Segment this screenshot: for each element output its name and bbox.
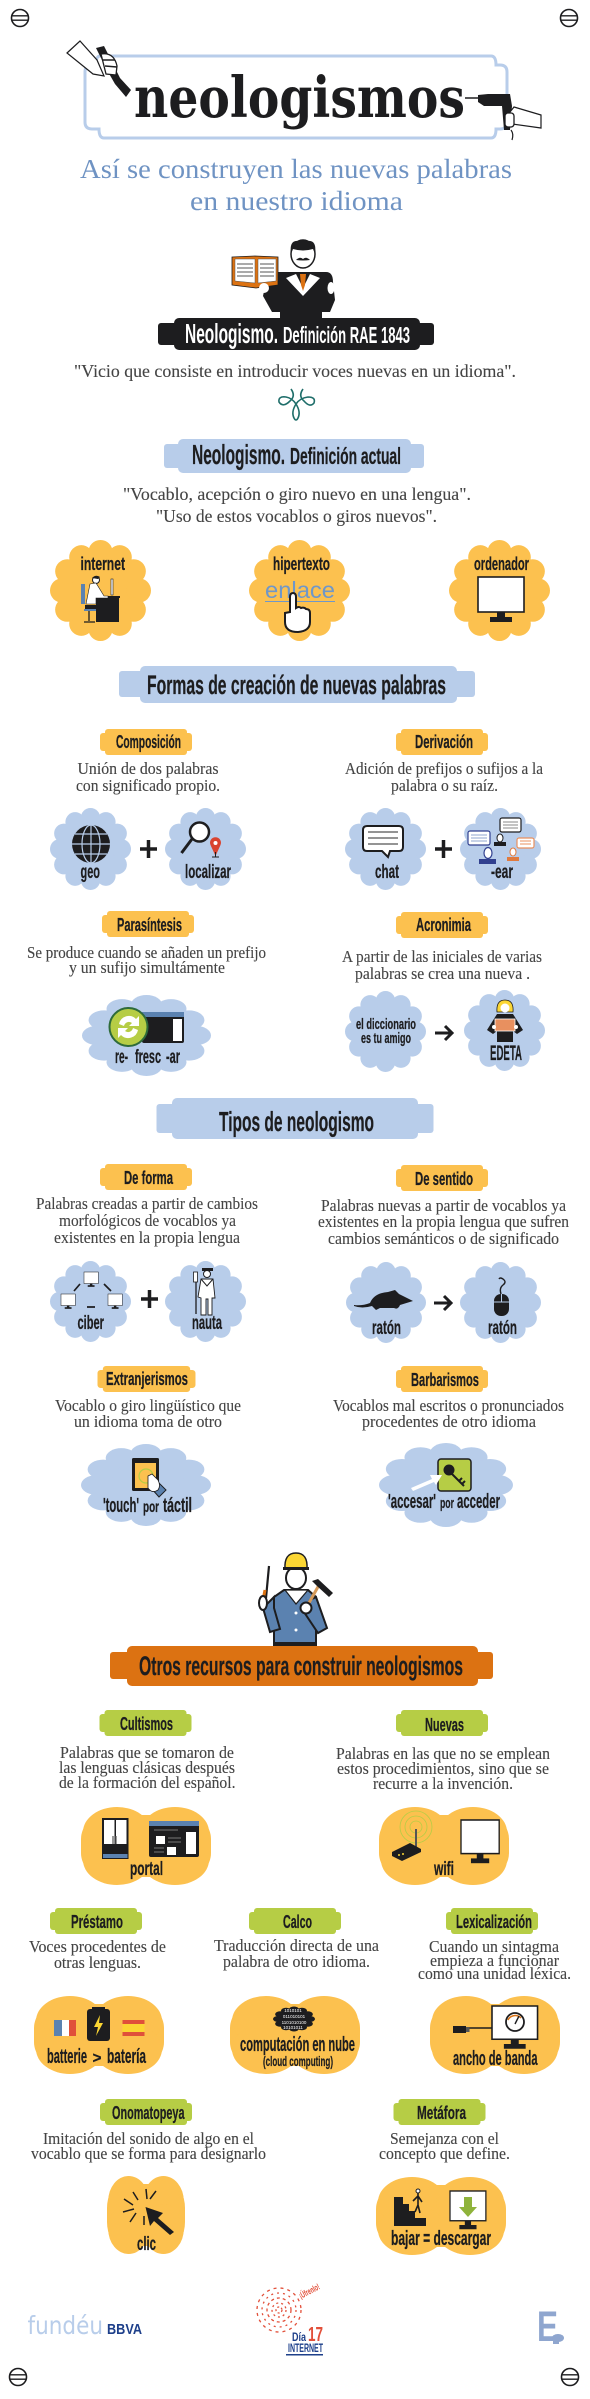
icon: binary cloud [273,2006,315,2032]
description: Traducción directa de una [214,1936,380,1955]
panel: composicion: localizar [185,862,231,883]
description: Palabras que se tomaron de [60,1743,234,1762]
icon: person at desk [81,576,120,622]
panel: onomatopeya: clic [137,2234,156,2255]
tab: Composición [116,732,181,752]
panel: calco: (cloud computing) [263,2053,333,2069]
tab: Calco [283,1912,312,1932]
tab: Metáfora [417,2103,467,2123]
tab [394,2099,486,2125]
current definition text [123,484,471,526]
banner: definicion actual [164,439,424,473]
corner mark bottom left [10,2368,26,2386]
plus [141,1290,158,1308]
description [27,943,266,977]
description: existentes en la propia lengua que sufren [318,1212,569,1231]
icon: person on stairs [394,2189,426,2226]
icon: monitor with gauge and cable [453,2006,538,2049]
banner: tipos de neologismo [156,1098,434,1139]
icon: web window [149,1821,199,1857]
icon: computer mouse [494,1278,509,1316]
arrow [434,1296,451,1310]
panel: parasintesis: fresc [135,1047,161,1068]
icon: chat bubble [363,826,403,857]
icon: battery [87,2007,110,2041]
tab [396,1710,488,1736]
tab: Parasíntesis [117,915,182,935]
description: Adición de prefijos o sufijos a la [345,759,544,778]
description: Unión de dos palabras [78,759,218,778]
icon: binary cloud: 1101010100 [282,2020,307,2025]
panel: lexicalizacion [418,1908,571,2074]
icon: hand with drill [465,94,541,140]
description [55,1396,241,1431]
description [59,1743,236,1792]
description [318,1196,569,1248]
panel: extranjerismos: por [143,1499,159,1516]
description: Voces procedentes de [29,1937,166,1956]
panel: composicion [50,729,246,890]
logo: Dia de Internet: INTERNET [288,2341,323,2355]
figure: construction worker [259,1553,333,1646]
panel: extranjerismos: táctil [163,1495,192,1517]
description [333,1396,564,1431]
panel: nuevas: wifi [433,1859,454,1880]
description: Palabras creadas a partir de cambios [36,1194,258,1213]
panel: de forma [36,1164,258,1342]
corner mark top left [12,10,28,26]
description: A partir de las iniciales de varias [342,947,542,966]
arrow [435,1026,452,1040]
icon: click cursor [123,2189,174,2235]
description: concepto que define. [379,2144,510,2163]
banner: definicion actual: Definición actual [290,443,401,469]
description: Palabras en las que no se emplean [336,1744,550,1763]
title text: neologismos [134,65,465,131]
panel: ordenador [449,540,550,641]
logo: Dia de Internet: Día [292,2330,306,2344]
banner: otros recursos [110,1646,493,1686]
tab: Préstamo [71,1912,123,1932]
panel: onomatopeya [31,2099,266,2255]
banner: formas de creacion [119,666,475,703]
panel: de sentido [318,1165,569,1343]
current definition text: "Vocablo, acepción o giro nuevo en una lengua". [123,484,471,504]
icon: french flag [54,2020,76,2036]
icon: network of monitors [61,1272,122,1309]
icon: binary cloud: 011010101 [283,2014,306,2019]
panel: barbarismos: por [440,1495,454,1512]
description: como una unidad léxica. [418,1964,571,1983]
panel: barbarismos: acceder [457,1491,500,1513]
description [345,759,544,795]
tab: Nuevas [425,1715,464,1735]
banner: definicion actual: Neologismo. [192,439,285,470]
description [76,759,220,795]
tab [446,1908,538,1934]
description [418,1937,571,1983]
description: palabra de otro idioma. [223,1952,370,1971]
description: un idioma toma de otro [74,1412,222,1431]
icon: monitor [461,1820,499,1863]
tab [100,729,192,755]
panel: derivacion [345,729,544,890]
tab [396,1165,488,1191]
logo: Dia de Internet [257,2281,323,2356]
panel: de sentido: ratón [488,1318,517,1339]
panel: prestamo: batería [107,2046,147,2068]
subtitle: en nuestro idioma [190,186,403,216]
icon: magnifier and pin [182,822,221,857]
banner: tipos de neologismo: Tipos de neologismo [219,1106,374,1137]
panel: extranjerismos: 'touch' [103,1495,139,1517]
panel: de forma: nauta [192,1313,222,1334]
tab [98,1366,195,1392]
panel: barbarismos [333,1366,564,1527]
icon: monitor [478,577,524,622]
tab [100,2099,192,2125]
corner mark top right [560,10,578,26]
panel: de forma: ciber [78,1313,104,1334]
icon: people chatting [468,818,534,864]
description [29,1937,166,1972]
plus [435,840,452,858]
panel: hipertexto: enlace [265,577,335,603]
logo: Dia de Internet: 17 [308,2324,323,2346]
panel: extranjerismos [55,1366,241,1526]
icon: woman reading [487,1000,523,1042]
description: existentes en la propia lengua [54,1228,241,1247]
tab [249,1908,341,1934]
description: con significado propio. [76,776,220,795]
description: Se produce cuando se añaden un prefijo [27,943,266,962]
description: de la formación del español. [59,1773,236,1792]
tab [102,911,194,937]
tab [396,912,488,938]
description [342,947,542,983]
old definition text: "Vicio que consiste en introducir voces nuevas en un idioma". [74,361,516,381]
panel: nuevas [336,1710,550,1885]
panel: internet [50,540,151,641]
black banner: Neologismo. [185,318,278,349]
panel: acronimia: el diccionario [356,1016,416,1033]
panel: acronimia: es tu amigo [361,1030,411,1047]
description [336,1744,550,1793]
description: morfológicos de vocablos ya [59,1211,237,1230]
panel: composicion: geo [80,862,100,883]
description [36,1194,258,1247]
panel: cultismos [59,1710,236,1885]
subtitle: Así se construyen las nuevas palabras [80,154,512,184]
logo: Dia de Internet: ¡Úfrenlo! [297,2281,321,2301]
tab: De forma [124,1168,174,1188]
black banner [158,318,434,350]
black banner: Definición RAE 1843 [283,322,410,348]
panel: barbarismos: 'accesar' [388,1491,436,1513]
description: otras lenguas. [54,1953,141,1972]
panel: internet: internet [80,554,125,574]
description: palabras se crea una nueva . [355,964,530,983]
panel: derivacion: -ear [491,862,513,883]
panel: parasintesis [27,911,266,1076]
icon: hand cursor [285,593,310,632]
panel: hipertexto [249,540,350,641]
tab [396,729,488,755]
icon: sailor [194,1268,215,1315]
icon: rat [354,1290,413,1310]
panel: parasintesis: re- [115,1047,128,1068]
description: Vocablos mal escritos o pronunciados [333,1396,564,1415]
icon: doors [102,1818,128,1859]
description: Vocablo o giro lingüístico que [55,1396,241,1415]
panel: cultismos: portal [130,1859,163,1880]
description [214,1936,380,1971]
plus [140,840,157,858]
description: las lenguas clásicas después [59,1758,235,1777]
corner mark bottom right [562,2368,578,2386]
description: Palabras nuevas a partir de vocablos ya [321,1196,567,1215]
icon: binary cloud: 10101011 [283,2025,303,2030]
tab: Derivación [415,732,473,752]
icon: refresh browser [110,1008,184,1046]
panel: calco: computación en nube [240,2034,355,2056]
tab [100,1164,192,1190]
tab: Acronimia [416,915,472,935]
panel: de sentido: ratón [372,1318,401,1339]
icon: hand with wrench [67,41,131,97]
icon: spanish flag [122,2020,144,2036]
tab: Barbarismos [411,1370,479,1390]
panel: prestamo [29,1908,166,2074]
panel: calco [214,1908,380,2074]
title plaque [85,56,507,138]
panel: prestamo: batterie [47,2046,87,2068]
logo: E: E [537,2303,558,2351]
description [31,2129,266,2163]
panel: metafora [376,2099,510,2255]
description [379,2129,510,2163]
icon: binary cloud: 1010101 [284,2008,302,2013]
subtitle [80,154,512,216]
description: Semejanza con el [390,2129,499,2148]
panel: acronimia: EDETA [490,1042,522,1065]
panel: metafora: bajar = descargar [391,2228,491,2250]
panel: ordenador: ordenador [474,554,529,574]
description: recurre a la invención. [373,1774,513,1793]
description: estos procedimientos, sino que se [337,1759,549,1778]
tab: De sentido [415,1169,473,1189]
panel: acronimia [342,912,545,1072]
description: y un sufijo simultámente [69,958,225,977]
icon: globe [72,825,110,863]
icon: wifi router [392,1811,432,1861]
logo: Fundeu BBVA: fundéu [28,2311,103,2340]
description: vocablo que se forma para designarlo [31,2144,266,2163]
description: Cuando un sintagma [429,1937,560,1956]
description: Imitación del sonido de algo en el [43,2129,254,2148]
description: palabra o su raíz. [391,776,498,795]
panel: prestamo: > [92,2050,102,2067]
tab: Cultismos [120,1714,173,1734]
tab: Extranjerismos [106,1369,188,1389]
description: cambios semánticos o de significado [328,1229,559,1248]
panel: parasintesis: -ar [166,1047,180,1068]
current definition text: "Uso de estos vocablos o giros nuevos". [156,506,437,526]
description: empieza a funcionar [430,1951,559,1970]
tab: Lexicalización [456,1912,532,1932]
icon: monitor with download arrow [450,2191,486,2229]
tab [396,1366,488,1392]
tab [50,1908,142,1934]
tab: Onomatopeya [112,2103,185,2123]
ornament [279,389,314,420]
figure: man with book [232,240,335,318]
panel: derivacion: chat [375,862,399,883]
tab [100,1710,192,1736]
description: procedentes de otro idioma [362,1412,537,1431]
logo: Fundeu BBVA: BBVA [107,2321,142,2338]
icon: tablet touch [132,1458,166,1497]
icon: key access [411,1459,471,1491]
panel: hipertexto: hipertexto [273,554,330,574]
